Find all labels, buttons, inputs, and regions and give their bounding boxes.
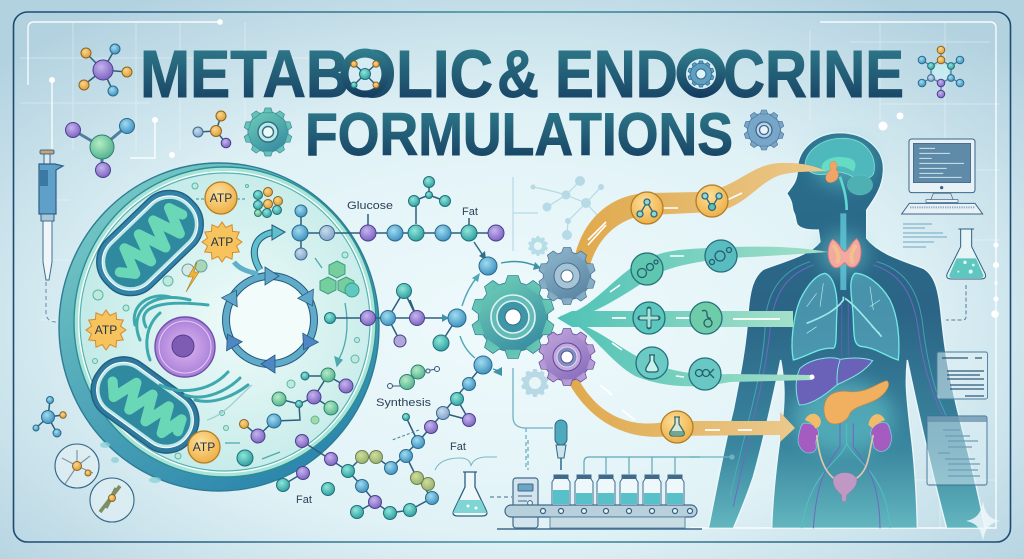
cell arrows (196, 199, 347, 459)
ATP star left: ATP (95, 323, 117, 337)
label: Fat upper: Fat (462, 206, 478, 218)
flask (453, 472, 487, 516)
node: orange flask (661, 411, 693, 443)
nucleus (155, 317, 215, 377)
ATP star upper: ATP (211, 235, 233, 249)
band: teal upper to thyroid (560, 247, 828, 319)
blood vessels (730, 262, 947, 528)
fat bracket (392, 430, 512, 497)
feed tubes (584, 457, 700, 474)
icon: gear inside O of ENDOCRINE (676, 48, 726, 98)
faded background molecule and connector lines (513, 176, 604, 397)
brain (805, 138, 874, 290)
panel: cell (59, 163, 379, 491)
kidneys and bladder (798, 414, 891, 502)
organ glow (793, 140, 893, 453)
title ampersand: & (497, 37, 539, 112)
cycle arrows (220, 225, 320, 373)
body silhouette (708, 133, 985, 528)
lungs (792, 273, 899, 360)
liver (796, 358, 873, 405)
icon: top-right hexagonal molecule (918, 46, 964, 98)
title word METABOLIC: METABOLIC (140, 37, 493, 112)
title word ENDOCRINE: ENDOCRINE (555, 37, 904, 112)
title line 2: FORMULATIONS (305, 101, 733, 168)
pathway: lower chain (276, 356, 502, 520)
node: cross molecule (633, 302, 665, 334)
ATP badge bottom (188, 431, 220, 463)
band: orange bottom to kidneys (566, 372, 795, 442)
icon: title gear blue (744, 110, 784, 150)
icon: right flask (946, 229, 986, 320)
node: orange molecule 1 (631, 192, 663, 224)
filling machine (513, 478, 538, 528)
label: Glucose: Glucose (347, 200, 393, 212)
sparkle (966, 501, 1000, 541)
gear: central teal (472, 276, 554, 358)
icon: lens with crystal (90, 478, 134, 522)
gear: lower purple (539, 329, 595, 385)
cell membrane (59, 163, 379, 491)
ATP badge top: ATP (210, 191, 232, 205)
figure: human body (708, 133, 985, 528)
icon: lens with star molecule (55, 444, 99, 488)
label: Fat lower left: Fat (296, 494, 312, 506)
band: teal lower to liver (560, 320, 814, 386)
mitochondrion upper (84, 178, 216, 308)
node: teal ring molecule (689, 358, 721, 390)
icon: bottom-left molecule (33, 396, 66, 437)
small organelles (92, 183, 360, 459)
icon: synthesis molecule (388, 365, 440, 390)
vials (552, 475, 684, 505)
band: teal middle to lungs (557, 311, 793, 327)
node: teal molecule 1 (631, 253, 663, 285)
icon: title gear green (244, 108, 292, 156)
pathway: glucose and fat chain (292, 176, 541, 275)
dispenser (555, 420, 567, 470)
node: teal molecule 2 (705, 240, 737, 272)
label: Fat lower right: Fat (450, 441, 466, 453)
connector line to production (513, 368, 734, 470)
gear: upper blue (539, 248, 595, 304)
glow dots (991, 242, 999, 318)
node: orange molecule 2 (696, 185, 728, 217)
pancreas (824, 381, 889, 424)
icon: molecule inside O of METABOLIC (340, 48, 390, 98)
conveyor belt (497, 505, 702, 529)
document panel upper (937, 352, 988, 399)
cell molecules (237, 368, 353, 466)
ATP star left (86, 310, 126, 350)
band: orange top to pituitary (575, 163, 826, 265)
document panel lower (927, 416, 987, 485)
ATP badge top (205, 182, 237, 214)
icon: hexagon cluster (320, 261, 359, 297)
flow nodes (631, 185, 737, 443)
ATP badge bottom: ATP (193, 440, 215, 454)
production line (453, 420, 702, 529)
mitochondrion lower (79, 345, 211, 465)
text lines block (903, 224, 947, 247)
node: green molecule (690, 302, 722, 334)
icon: top-left molecule (79, 44, 132, 96)
node: teal flask (636, 347, 668, 379)
icon: energy bolt (182, 260, 207, 292)
icon: green and purple molecule (66, 118, 134, 178)
label: Synthesis: Synthesis (376, 397, 432, 409)
icon: molecule cluster (254, 188, 282, 218)
ATP star upper (202, 222, 242, 262)
icon: small orange molecule (193, 111, 231, 148)
icon: pituitary gland (826, 161, 838, 183)
pathway: middle chain (324, 273, 480, 358)
icon: computer (902, 139, 983, 214)
thyroid gland (828, 239, 861, 268)
icon: pipette (39, 150, 63, 322)
golgi membranes (134, 296, 248, 401)
title (140, 37, 904, 168)
